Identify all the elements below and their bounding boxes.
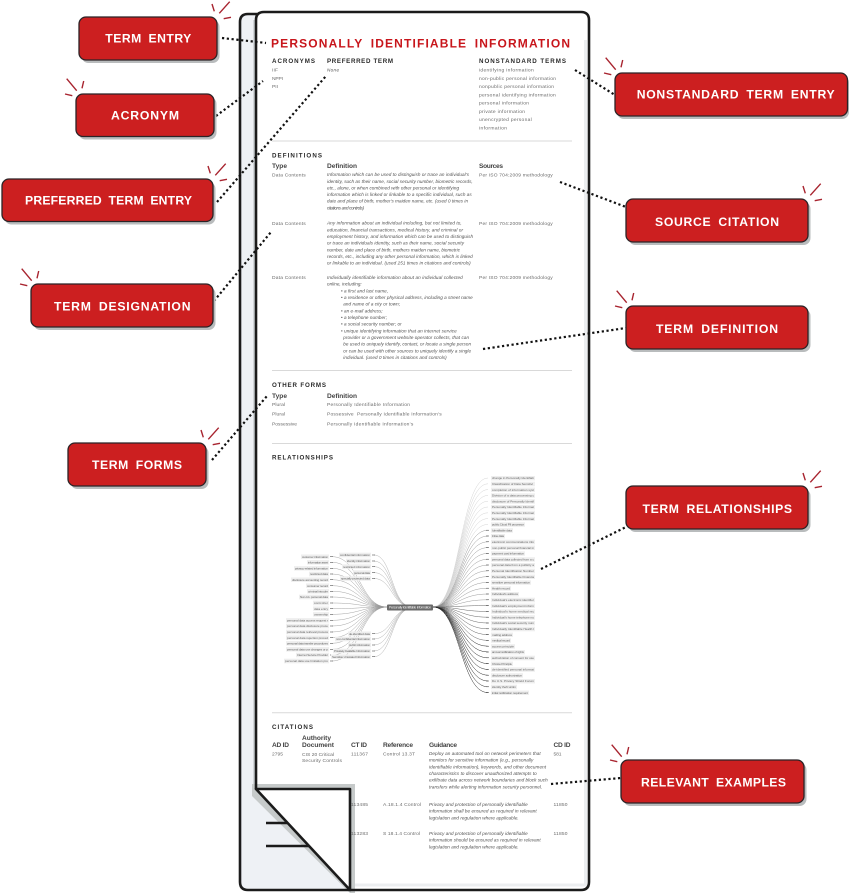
section: nonstandard terms: identifying information xyxy=(479,67,534,73)
section: citations table: CIS 20 Critical xyxy=(302,752,334,758)
section: citations table: Security Controls xyxy=(302,758,343,764)
left branch labels: restricted data xyxy=(310,572,328,576)
section: definitions: Data Contents xyxy=(272,172,306,178)
right branch labels xyxy=(491,476,535,695)
section: citations table: Authority xyxy=(302,735,331,742)
left branch labels: personal data use limitation pro xyxy=(285,659,328,663)
section: nonstandard terms xyxy=(479,58,566,131)
right branch labels: sensitive personal information xyxy=(492,581,530,585)
section: citations table: CT ID xyxy=(351,742,367,749)
left branch labels: criminal intruder xyxy=(308,590,328,594)
callout: term forms: TERM FORMS xyxy=(92,458,182,472)
left branch labels: personal data rejection proced xyxy=(287,636,328,640)
connector: term relationships xyxy=(541,527,626,569)
left branch labels: restricted information xyxy=(343,565,370,569)
section: definitions: individual. (used 0 times in citations and controls) xyxy=(343,355,447,360)
section: definitions: Individually identifiable information about an individual collected xyxy=(327,275,463,280)
left branch labels: specially protected data xyxy=(341,577,370,581)
callout: relevant examples xyxy=(610,745,806,806)
section: other forms: Definition xyxy=(327,393,357,400)
section: citations table: A.18.1.4 Control xyxy=(383,802,421,808)
section: definitions: • a telephone number; xyxy=(341,315,388,320)
left branch labels: Sensitive Unrelated Information xyxy=(332,655,370,659)
section: nonstandard terms: NONSTANDARD TERMS xyxy=(479,58,566,65)
right branch labels: non-public personal financial in xyxy=(492,546,534,550)
section: definitions: Information which can be used to distinguish or trace an individual's xyxy=(327,172,470,177)
left branch labels: Internet Service Provider xyxy=(297,653,328,657)
right branch labels: public Cloud PII processor xyxy=(492,523,524,527)
right branch labels: electronic communications info xyxy=(492,540,534,544)
section: definitions: citations and controls) xyxy=(327,205,364,210)
section: citations table: legislation and regulation where applicable. xyxy=(429,815,519,820)
callout: term relationships: TERM RELATIONSHIPS xyxy=(642,502,792,516)
section: citations table: Document xyxy=(302,742,335,749)
section: citations table: 111367 xyxy=(351,752,368,758)
section: nonstandard terms: personal information xyxy=(479,100,529,106)
section: definitions: and name of a city or town; xyxy=(343,302,401,307)
connector: acronym xyxy=(216,81,263,116)
section: citations table: monitors for sensitive information (e.g., personally xyxy=(429,758,534,763)
left branch labels: personal data xyxy=(354,571,370,575)
section: definitions: Any information about an individual including, but not limited to, xyxy=(326,221,462,226)
section: nonstandard terms: private information xyxy=(479,109,525,115)
right branch labels: Individual's social security num xyxy=(492,621,534,625)
right branch labels: payment card information xyxy=(492,552,524,556)
section: citations table: 11850 xyxy=(554,831,568,837)
right branch labels: Health record xyxy=(492,586,510,590)
section: other forms: Possessive Personally Identifiable Information's xyxy=(327,412,442,418)
callout: nonstandard term entry: NONSTANDARD TERM ENTRY xyxy=(637,88,835,102)
document page illustration xyxy=(240,12,589,893)
folded page corner xyxy=(256,789,350,890)
right branch labels: Personally Identifiable Informat xyxy=(492,517,534,521)
section: other forms: Possessive xyxy=(272,422,297,428)
section: nonstandard terms: nonpublic personal information xyxy=(479,84,554,90)
left branch labels: identity information xyxy=(347,559,370,563)
section: definitions: date and place of birth, mother's maiden name, etc. (used 0 times in xyxy=(327,199,468,204)
section: definitions: provider or a government website operator collects, that can xyxy=(342,335,469,340)
right branch labels: medical record xyxy=(492,639,510,643)
section: acronyms: ACRONYMS xyxy=(272,58,315,65)
section: citations table xyxy=(272,724,571,849)
right branch labels: Individual's address xyxy=(492,592,518,596)
callout: term designation xyxy=(20,269,216,330)
section: other forms: Plural xyxy=(272,412,285,418)
callout: term entry: TERM ENTRY xyxy=(105,32,191,46)
section: definitions: DEFINITIONS xyxy=(272,152,322,159)
connector: relevant examples xyxy=(551,778,621,784)
left branch labels: Non-Us. personal data xyxy=(300,595,328,599)
left branch labels: information asset xyxy=(308,560,328,564)
section: definitions: identity, such as their name, social security number, biometric records, xyxy=(327,179,473,184)
section: nonstandard terms: personal identifying information xyxy=(479,92,556,98)
callout: acronym xyxy=(65,79,216,140)
section: definitions: records, etc., including any other personal information, which is linked xyxy=(327,254,473,259)
callout: term relationships xyxy=(626,471,822,532)
section: acronyms xyxy=(272,58,315,90)
left branch labels: Privately Available Information xyxy=(334,649,370,653)
section: acronyms: PII xyxy=(272,84,278,90)
section: citations table: CD ID xyxy=(554,742,571,749)
callout: term forms xyxy=(68,428,220,489)
section: other forms: Type xyxy=(272,393,287,400)
right branch labels: Individually Identifiable Health I xyxy=(492,627,534,631)
callout: preferred term entry: PREFERRED TERM ENTRY xyxy=(25,194,192,208)
left branch labels: data entry xyxy=(314,607,328,611)
section: definitions: number, date and place of birth, mothers maiden name, biometric xyxy=(327,247,461,252)
section: citations table: 2795 xyxy=(272,752,283,758)
section: citations table: Privacy and protection of personally identifiable xyxy=(429,802,528,807)
callout: term entry xyxy=(79,2,231,63)
section: definitions: information which is linked or linkable to a specific individual, such as xyxy=(327,192,472,197)
section: definitions: • a social security number; or xyxy=(341,322,402,327)
right branch labels: Do U.S. Privacy Shield Forum xyxy=(492,679,534,683)
central node xyxy=(387,604,433,610)
callout: term definition xyxy=(615,291,810,352)
callout: term designation: TERM DESIGNATION xyxy=(54,300,190,314)
left branch labels: public information xyxy=(349,643,370,647)
callout: preferred term entry xyxy=(2,164,227,224)
callout: relevant examples: RELEVANT EXAMPLES xyxy=(641,775,786,789)
left branch labels: controller xyxy=(314,601,328,605)
title: PERSONALLY IDENTIFIABLE INFORMATION xyxy=(271,36,570,50)
section: citations table: CITATIONS xyxy=(272,724,313,731)
section: citations table: 11850 xyxy=(554,802,568,808)
section: definitions: Definition xyxy=(327,163,357,170)
callout: source citation: SOURCE CITATION xyxy=(655,215,779,229)
left branch labels: personal data retrieval process xyxy=(287,630,328,634)
section: nonstandard terms: information xyxy=(479,125,507,131)
central node: Personally Identifiable Information xyxy=(389,606,431,610)
section: definitions xyxy=(272,152,553,360)
right branch labels: personal data from a publicly a xyxy=(492,563,534,567)
right branch labels: disclosure authorization xyxy=(492,673,522,677)
callout: nonstandard term entry xyxy=(604,58,849,119)
left branch labels: personal data transfer procedures xyxy=(287,642,328,646)
section: citations table: 581 xyxy=(554,752,562,758)
connector: term forms xyxy=(212,396,267,460)
left branch labels: personal data use changes or p xyxy=(287,648,328,652)
section: citations table: Control 13.3T xyxy=(383,752,415,758)
right branch labels: change in Personally Identifiab xyxy=(492,476,534,480)
left branch labels: personal data disclosure proce xyxy=(287,624,328,628)
heading: relationships: RELATIONSHIPS xyxy=(272,455,333,462)
right branch labels: personal data collected from a c xyxy=(492,557,534,561)
connector: term entry xyxy=(222,38,266,43)
left branch labels: personal data access request r xyxy=(287,618,328,622)
section: definitions: be used to uniquely identify, contact, or locate a single person xyxy=(343,342,471,347)
section: citations table: Privacy and protection of personally identifiable xyxy=(429,831,528,836)
right branch labels: Personal Identification Number xyxy=(492,569,534,573)
section: definitions: • unique identifying information that an internet service xyxy=(341,328,457,333)
section: citations table: exfiltrate data across network boundaries and block such xyxy=(429,778,548,783)
right branch labels: Personally Identifiable Informat xyxy=(492,511,534,515)
section: definitions: Type xyxy=(272,163,287,170)
section: definitions: Per ISO 704:2009 methodology xyxy=(479,221,553,227)
section: definitions: • an e-mail address; xyxy=(341,308,383,313)
section: definitions: online, including: xyxy=(327,282,362,287)
section: citations table: 113283 xyxy=(351,831,368,837)
section: definitions: or trace an individuals identity, such as their name, social security xyxy=(327,241,465,246)
section: citations table: transfers while alerting information security personnel. xyxy=(429,784,542,789)
section: definitions: Data Contents xyxy=(272,221,306,227)
section: definitions: • a residence or other physical address, including a street name xyxy=(341,295,473,300)
right branch labels: Division of a data processing c xyxy=(492,494,534,498)
right branch labels: Individual's home telephone nu xyxy=(492,615,534,619)
section: preferred term: None xyxy=(327,67,339,72)
section: definitions: employment history, and information which can be used to distinguish xyxy=(327,234,473,239)
section: definitions: • a first and last name, xyxy=(341,288,388,293)
section: definitions: education, financial transactions, medical history, and criminal or xyxy=(327,227,463,232)
right branch labels: Identifiable data xyxy=(492,528,512,532)
section: other forms: Personally Identifiable Information's xyxy=(327,422,414,428)
section: definitions: Data Contents xyxy=(272,275,306,281)
right branch labels: mailing address xyxy=(492,633,512,637)
right branch labels: Inline data xyxy=(492,534,504,538)
callout: term definition: TERM DEFINITION xyxy=(656,322,778,336)
right branch labels: disclosure of Personally Identif xyxy=(492,499,534,503)
section: citations table: information shall be ensured as required in relevant xyxy=(429,809,537,814)
right branch labels: initial notification requirement xyxy=(492,691,528,695)
section: definitions: etc., alone, or when combined with other personal or identifying xyxy=(327,185,459,190)
left branch labels xyxy=(284,553,371,663)
left branch labels: de-identified data xyxy=(349,632,370,636)
section: citations table: identifiable information), keywords, and other document xyxy=(429,764,547,769)
connector: nonstandard term xyxy=(575,70,615,95)
section: nonstandard terms: non-public personal information xyxy=(479,76,556,82)
right branch labels: annual notification of rights xyxy=(492,650,524,654)
callout: acronym: ACRONYM xyxy=(111,108,179,122)
section: definitions: Per ISO 704:2009 methodology xyxy=(479,275,553,281)
left branch labels: disclosure accounting record xyxy=(292,578,328,582)
relationships tree chart xyxy=(284,476,535,695)
section: citations table: information should be ensured as required in relevant xyxy=(429,838,541,843)
section: citations table: Reference xyxy=(383,742,413,749)
section: other forms xyxy=(272,382,442,428)
callout: source citation xyxy=(626,184,822,245)
right branch labels: completion of information syst xyxy=(492,488,534,492)
section: acronyms: NPPI xyxy=(272,76,283,82)
section: nonstandard terms: unencrypted personal xyxy=(479,117,532,123)
connector: term designation xyxy=(214,232,271,301)
section: citations table: Guidance xyxy=(429,742,457,749)
right branch labels: Choice Principle xyxy=(492,662,512,666)
section: other forms: Plural xyxy=(272,402,285,408)
right branch labels: Personally Identifiable Informat xyxy=(492,505,534,509)
section: definitions: or linkable to an individual. (used 251 times in citations and controls) xyxy=(327,261,471,266)
right branch labels: Individual's electronic identifier xyxy=(492,598,534,602)
left branch labels: customer information xyxy=(302,555,328,559)
section: definitions: Sources xyxy=(479,163,503,170)
section: citations table: characteristics to discover unauthorized attempts to xyxy=(429,771,537,776)
section: preferred term: PREFERRED TERM xyxy=(327,58,393,65)
section: citations table: AD ID xyxy=(272,742,289,749)
section: citations table: Deploy an automated tool on network perimeters that xyxy=(429,751,541,756)
connector: source citation xyxy=(560,182,626,207)
right branch labels: Individual's home medical rec xyxy=(492,610,534,614)
right branch labels: identity theft victim xyxy=(492,685,516,689)
right branch labels: Personally Identifiable Financia xyxy=(492,575,534,579)
section: definitions: Per ISO 704:2009 methodology xyxy=(479,172,553,178)
section: acronyms: IIF xyxy=(272,67,278,73)
section: other forms: OTHER FORMS xyxy=(272,382,326,389)
section: other forms: Personally Identifiable Information xyxy=(327,402,410,408)
left branch labels: confidential information xyxy=(340,553,370,557)
section: citations table: legislation and regulation where applicable. xyxy=(429,844,519,849)
left branch labels: non-confidential information xyxy=(336,637,370,641)
section: preferred term xyxy=(327,58,393,72)
left branch labels: ownership xyxy=(314,612,328,616)
connector: preferred term xyxy=(217,76,326,202)
right branch labels: access principle xyxy=(492,644,514,648)
right branch labels: de-identified personal informat xyxy=(492,668,534,672)
right branch labels: Individual's employment inform xyxy=(492,604,534,608)
right branch labels: Classification of Data Sensitivi xyxy=(492,482,533,486)
left branch labels: consumer record xyxy=(307,584,328,588)
section: citations table: 113485 xyxy=(351,802,368,808)
connector: term definition xyxy=(483,328,626,349)
right branch labels: authorization of consent for use xyxy=(492,656,534,660)
left branch labels: privacy-related information xyxy=(295,566,328,570)
section: citations table: S 18.1.4 Control xyxy=(383,831,420,837)
section: definitions: or can be used with other sources to uniquely identify a single xyxy=(343,348,471,353)
